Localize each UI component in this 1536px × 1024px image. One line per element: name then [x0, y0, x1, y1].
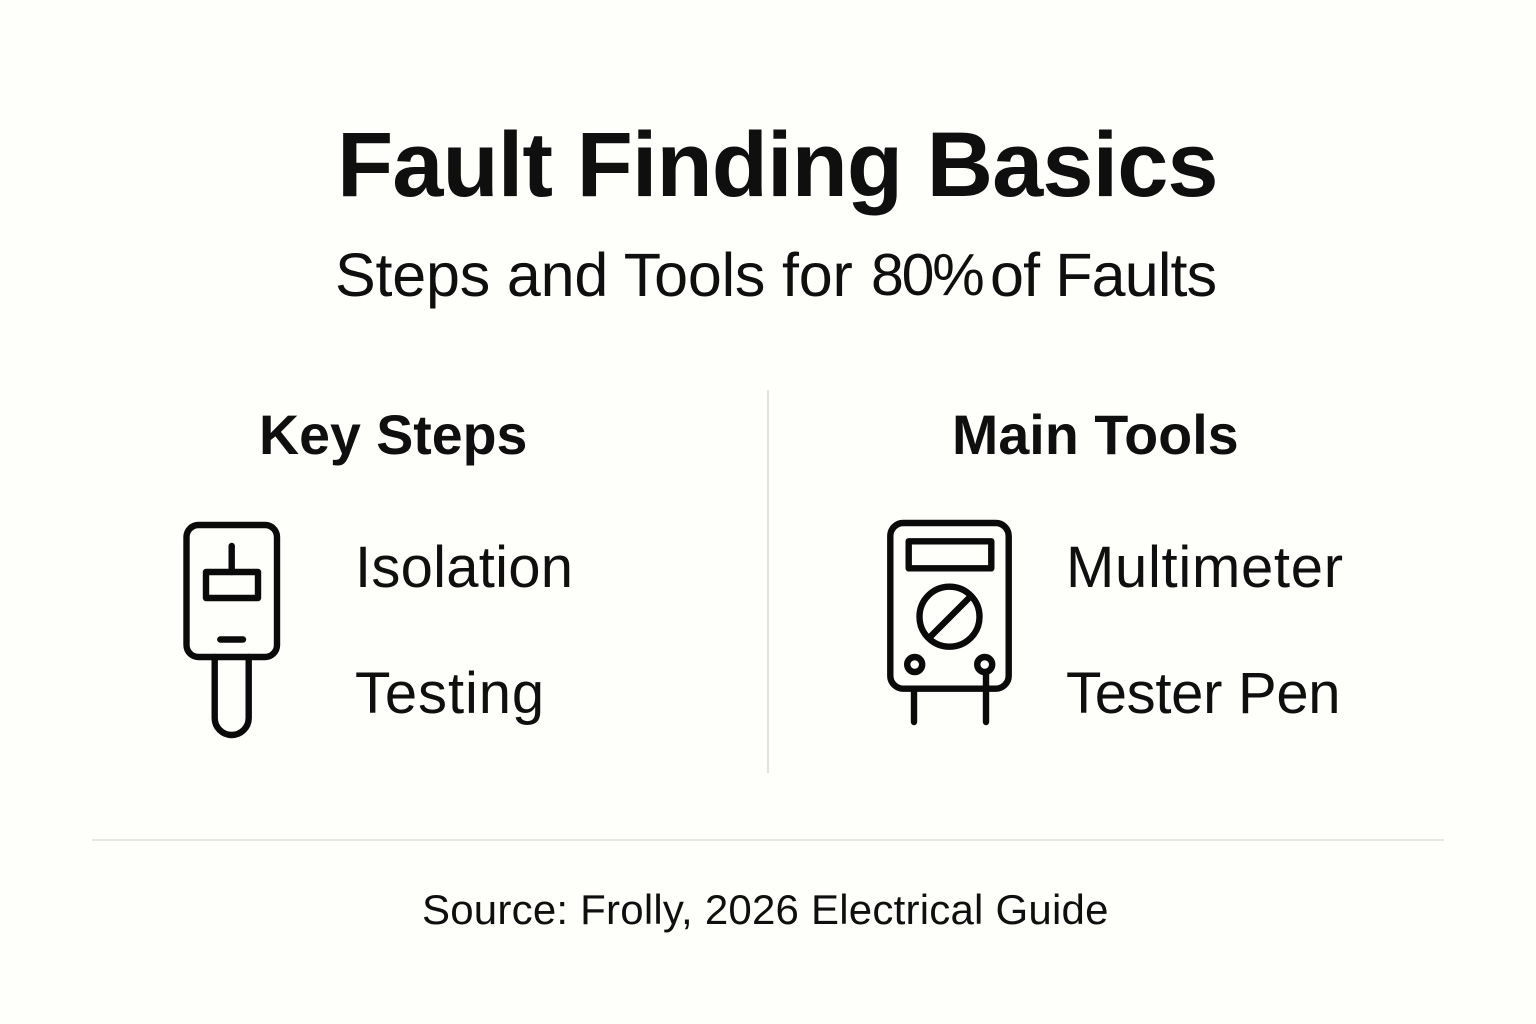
label: isolation: Isolation — [355, 535, 573, 600]
panel: key steps — [183, 404, 573, 738]
panel: main tools — [887, 404, 1344, 726]
subtitle — [335, 241, 1216, 309]
subtitle: of Faults — [990, 241, 1216, 309]
label: multimeter: Multimeter — [1066, 535, 1344, 600]
subtitle: 80% — [871, 242, 982, 308]
source note: Source: Frolly, 2026 Electrical Guide — [422, 886, 1109, 933]
icon: multimeter — [887, 520, 1012, 726]
title: Fault Finding Basics — [337, 114, 1218, 216]
label: testing: Testing — [355, 661, 545, 726]
footer divider — [92, 839, 1444, 841]
heading: main tools: Main Tools — [952, 404, 1239, 466]
column divider — [767, 390, 769, 773]
subtitle: Steps and Tools for — [335, 241, 853, 309]
icon: isolation switch — [183, 522, 280, 738]
heading: key steps: Key Steps — [259, 404, 527, 466]
label: tester pen: Tester Pen — [1066, 661, 1340, 726]
